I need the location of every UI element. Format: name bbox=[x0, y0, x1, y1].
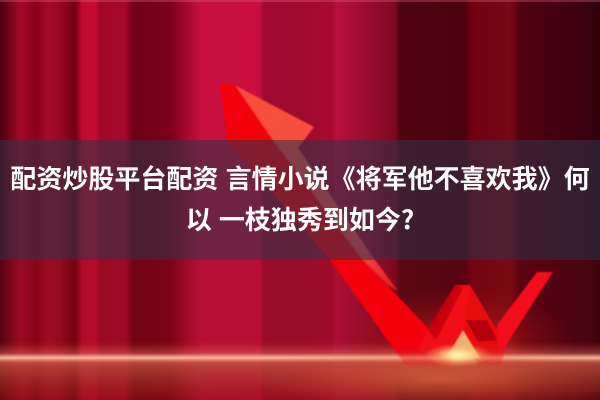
arrow bbox=[220, 83, 553, 370]
title: 配资炒股平台配资 言情小说《将军他不喜欢我》何以 一枝独秀到如今? bbox=[10, 164, 590, 237]
arrow: dark red face bbox=[220, 83, 447, 370]
translucent title band bbox=[0, 140, 600, 260]
warm floor under the arrow bbox=[250, 344, 600, 400]
arrow: first rise bbox=[418, 284, 471, 365]
centre light bbox=[0, 330, 600, 367]
arrow: second drop bbox=[463, 284, 500, 365]
arrow: light face bbox=[236, 86, 398, 291]
horizon glow band bbox=[0, 342, 600, 400]
arrow: last rise bbox=[497, 272, 553, 370]
warm tint behind zigzag bbox=[345, 285, 575, 400]
